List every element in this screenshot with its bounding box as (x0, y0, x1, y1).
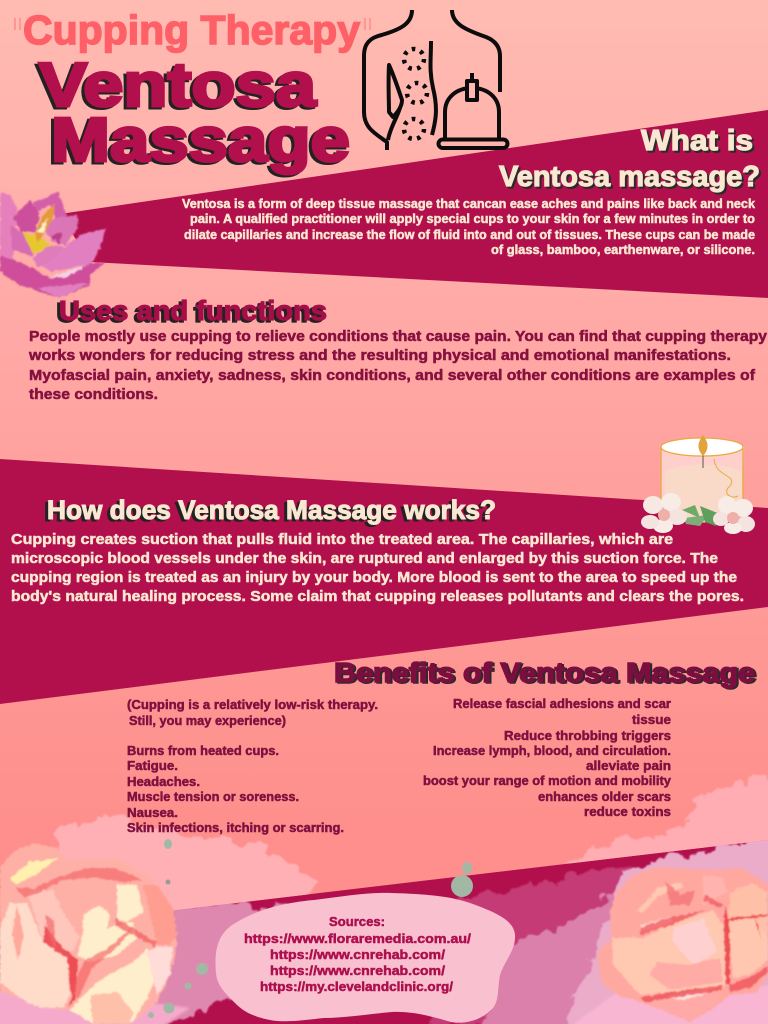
panel: sources: Sources: (329, 914, 385, 929)
list: benefits: alleviate pain (586, 759, 671, 773)
text: uses and functions: People mostly use cupping to relieve conditions that cause pain. You can find that cupping therapy (29, 329, 767, 345)
text: how it works: cupping region is treated as an injury by your body. More blood is sent to the area to speed up the (11, 570, 737, 586)
small grey-green watercolor spots (148, 839, 473, 1018)
icon: pink lotus (0, 192, 106, 298)
text: what is ventosa (182, 197, 755, 257)
list: risks: Still, you may experience) (129, 714, 286, 728)
icon: left peony (0, 843, 177, 1024)
icon: candle with flowers (641, 435, 755, 534)
heading: benefits: Benefits of Ventosa Massage (334, 657, 755, 688)
panel: sources: https://my.clevelandclinic.org/ (260, 979, 453, 994)
text: what is ventosa: dilate capillaries and increase the flow of fluid into and out of tissues. These cups can be made (184, 228, 755, 242)
heading: how does ventosa massage work: How does Ventosa Massage works? (47, 495, 496, 525)
text: uses and functions: works wonders for reducing stress and the resulting physical and emotional manifestations. (28, 348, 731, 364)
text: how it works: microscopic blood vessels under the skin, are ruptured and enlarged by this suction force. The (11, 551, 718, 567)
list: benefits: enhances older scars (538, 790, 671, 804)
heading: uses and functions: Uses and functions (59, 295, 327, 326)
list: benefits: Release fascial adhesions and scar (453, 697, 671, 711)
heading: what is ventosa massage: What is (641, 125, 753, 157)
title: ventosa massage (39, 51, 350, 175)
list: risks (127, 698, 378, 835)
title: ventosa massage: Ventosa (39, 51, 317, 120)
list: risks: (Cupping is a relatively low-risk therapy. (127, 698, 378, 712)
list: risks: Fatigue. (127, 759, 178, 773)
panel: sources: https://www.cnrehab.com/ (270, 963, 445, 978)
panel: sources: https://www.cnrehab.com/ (270, 947, 445, 962)
list: risks: Burns from heated cups. (127, 744, 279, 758)
list: benefits: Increase lymph, blood, and circulation. (433, 744, 671, 758)
text: how it works: Cupping creates suction that pulls fluid into the treated area. The capillaries, which are (11, 532, 673, 548)
band: what is ventosa (60, 110, 768, 298)
list: benefits (423, 697, 671, 819)
watercolor footer background (0, 775, 768, 1024)
title: cupping therapy: Cupping Therapy (23, 7, 360, 53)
heading: what is ventosa massage: Ventosa massage? (499, 161, 760, 193)
list: benefits: reduce toxins (584, 805, 671, 819)
text: how it works: body's natural healing process. Some claim that cupping releases pollutants and clears the pores. (11, 589, 744, 605)
title: ventosa massage: Massage (51, 106, 350, 175)
text: uses and functions: Myofascial pain, anxiety, sadness, skin conditions, and several other conditions are examples of (29, 368, 755, 384)
panel: sources: https://www.floraremedia.com.au/ (244, 931, 471, 946)
panel: sources (216, 893, 515, 1023)
list: risks: Headaches. (127, 775, 200, 789)
text: what is ventosa: of glass, bamboo, earthenware, or silicone. (491, 243, 755, 257)
list: risks: Nausea. (127, 806, 178, 820)
band: how it works (0, 459, 768, 704)
list: benefits: boost your range of motion and mobility (423, 774, 671, 788)
text: how it works (11, 532, 744, 605)
list: risks: Skin infections, itching or scarring. (127, 821, 344, 835)
icon: back with cupping marks (364, 10, 508, 150)
list: benefits: Reduce throbbing triggers (504, 729, 671, 743)
text: uses and functions: these conditions. (29, 387, 158, 403)
icon: right peony (598, 867, 768, 1022)
text: uses and functions (28, 329, 767, 403)
text: what is ventosa: pain. A qualified practitioner will apply special cups to your skin for a few minutes in order to (190, 212, 755, 226)
list: benefits: tissue (632, 713, 671, 727)
list: risks: Muscle tension or soreness. (127, 790, 299, 804)
heading: what is ventosa massage (499, 125, 760, 193)
text: what is ventosa: Ventosa is a form of deep tissue massage that cancan ease aches and pains like back and neck (182, 197, 755, 211)
